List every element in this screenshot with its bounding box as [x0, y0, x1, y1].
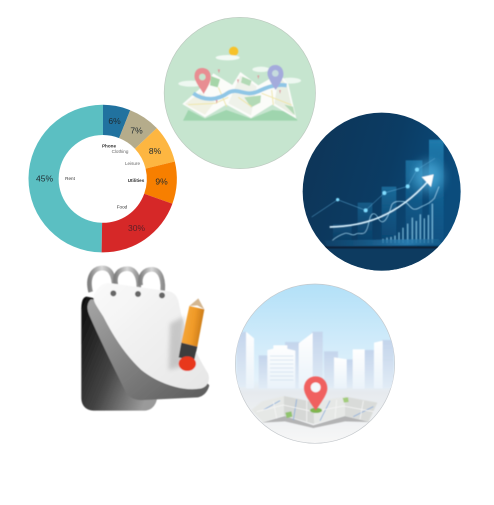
map shadow [183, 110, 298, 121]
percentage labels: 8% [149, 146, 162, 156]
glowing dots [336, 168, 419, 212]
building windows [270, 355, 294, 380]
category labels: Rent [65, 176, 76, 181]
pencil shadow [169, 317, 184, 370]
donut segment: rent 45% [28, 105, 103, 252]
fine bars [382, 204, 433, 243]
glowing area [413, 162, 443, 192]
percentage labels: 6% [108, 116, 121, 126]
category labels: Phone [102, 144, 116, 148]
infographic canvas [28, 17, 461, 444]
rising arrow [330, 174, 434, 227]
pin: blue [268, 65, 283, 90]
dark blue disc [303, 113, 461, 271]
map pin [304, 376, 327, 411]
thin line chart [312, 158, 435, 217]
pin base [310, 408, 322, 413]
percentage labels: 7% [130, 126, 143, 136]
circle: growth chart on dark blue [303, 113, 461, 272]
donut segment: phone 6% [103, 105, 130, 138]
category labels: Leisure [125, 161, 140, 166]
rings [89, 268, 163, 295]
icon: notepad with pencil [81, 268, 209, 411]
mid cover [87, 299, 209, 400]
back cover [81, 297, 160, 411]
pencil [179, 298, 204, 371]
white buildings [246, 332, 383, 389]
clouds [178, 67, 301, 87]
category labels: Utilities [128, 178, 145, 183]
wavy line [332, 187, 439, 240]
category labels: Food [117, 204, 128, 210]
route river [193, 85, 287, 99]
category labels: Clothing [112, 149, 129, 154]
percentage labels: 9% [155, 176, 168, 186]
donut segment: utilities 9% [144, 162, 177, 204]
circle: folded map with route [164, 17, 315, 169]
sun and cloud [216, 47, 240, 60]
percentage labels [36, 116, 168, 233]
sky disc [235, 284, 395, 443]
paper sheet [94, 283, 209, 389]
folded map [182, 72, 296, 119]
pin: red [195, 68, 211, 94]
circle: city skyline with map pin [235, 284, 395, 443]
percentage labels: 30% [128, 223, 145, 233]
small pins [216, 69, 281, 104]
skyline towers [237, 332, 394, 389]
donut chart [28, 105, 177, 252]
folded map [251, 396, 377, 424]
donut segment: food 30% [102, 194, 172, 252]
category labels [65, 144, 145, 210]
ring holes [110, 290, 165, 298]
donut segment: leisure 8% [135, 128, 175, 169]
donut segment: clothing 7% [119, 110, 157, 149]
green disc [164, 17, 315, 169]
bars [333, 140, 444, 241]
device base [318, 239, 445, 272]
percentage labels: 45% [36, 174, 53, 184]
map shadow [262, 416, 370, 428]
